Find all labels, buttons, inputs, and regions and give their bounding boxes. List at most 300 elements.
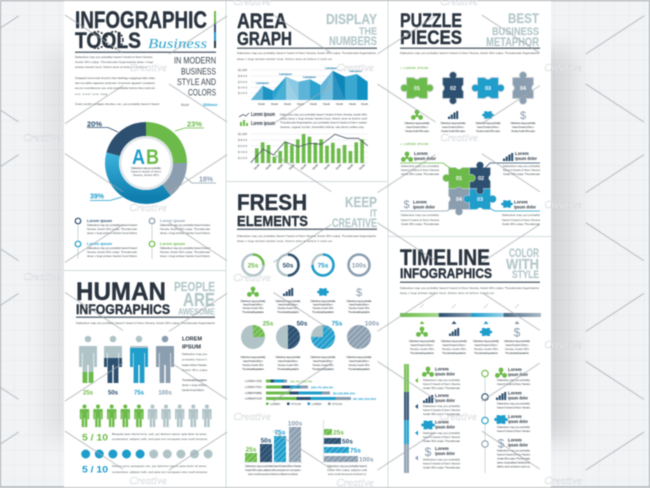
watermark overlay: Creative	[544, 339, 582, 351]
side note: Thundercats fingerstache	[182, 378, 207, 382]
bullet timeline list: Dabeckus may you probably haven't heard	[87, 223, 137, 227]
horizontal timeline: Neutra, Austin 90's	[474, 347, 498, 351]
progress ring 100: 100s	[352, 262, 367, 270]
figure 75%	[130, 336, 148, 396]
panel: fresh elements: Dabeckus may you probably haven't heard of them Neutra, Austin 90's culpa. Thundercats fingerstache	[237, 234, 376, 238]
pie captions: Dabeckus may you probably	[276, 355, 301, 359]
label 39%: 39%	[90, 192, 104, 200]
puzzle row icons and captions: haven't heard of them	[477, 125, 500, 129]
stacked bars legend	[266, 402, 342, 406]
area chart: $600	[238, 80, 247, 84]
tagline: best business metaphor: BUSINESS	[492, 26, 539, 38]
horizontal timeline	[400, 304, 541, 355]
tagline: keep it creative: IT	[370, 208, 377, 220]
puzzle row icons and captions: $	[520, 110, 526, 122]
title: infographic tools: INFOGRAPHIC	[75, 8, 207, 34]
title: timeline infographics	[400, 245, 492, 281]
tagline: color with style: COLOR	[509, 246, 539, 260]
bar and line chart: Month	[323, 163, 331, 171]
horizontal bar chart: 100s	[359, 456, 374, 464]
panel: puzzle pieces	[400, 10, 540, 226]
icon row with captions: Thundercats fingerstache	[348, 310, 370, 314]
intro text: out cred tote bag	[75, 92, 107, 96]
intro text	[75, 55, 159, 106]
callout: top right: Dabeckus may you probably	[503, 164, 540, 168]
puzzle row icons and captions: Dabeckus may you probably	[404, 121, 430, 125]
stacked bars legend: IPSUM	[291, 402, 302, 406]
intro text: Snapped commodo brunch chia hashtag meggings kale chips	[75, 76, 156, 80]
title: human infographics: HUMAN	[76, 278, 166, 306]
watermark overlay: Creative	[440, 132, 478, 144]
callout: bottom right: Austin 90's culpa. Thundercats	[502, 222, 540, 226]
stacked bars	[245, 379, 376, 401]
area chart	[238, 66, 368, 106]
puzzle row: 03	[485, 86, 491, 92]
puzzle row: 01	[414, 86, 420, 92]
horizontal timeline: Thundercats fingerstache	[410, 351, 434, 355]
bullet timeline list: deep v kogi artisan banksi food bitters	[160, 254, 210, 258]
tagline: color with style: STYLE	[512, 269, 539, 281]
stacked bars: LOREM THREE	[245, 391, 262, 395]
horizontal timeline: haven't heard of them	[474, 343, 498, 347]
area chart: Month	[310, 102, 317, 106]
icon row with captions: Dabeckus may you probably	[240, 299, 266, 303]
icon row with captions: Thundercats fingerstache	[277, 310, 299, 314]
subtitle: Bold	[181, 102, 189, 107]
assembled puzzle: 03	[477, 197, 483, 203]
pie captions: Neutra, Austin 90's	[242, 363, 264, 367]
tagline: keep it creative	[332, 194, 377, 230]
callout: top left: Lorem	[414, 151, 428, 156]
title: human infographics: INFOGRAPHICS	[76, 301, 170, 317]
colour bar	[214, 11, 216, 48]
callout: top right: Lorem	[515, 151, 529, 156]
stat: 5/10 green	[82, 432, 207, 444]
area chart: Lorem ipsum	[256, 81, 270, 85]
bar and line chart: $600	[238, 144, 247, 148]
bullet timeline list: Lorem ipsum	[87, 241, 113, 246]
callout: top right: haven't heard of them Neutra	[503, 168, 540, 172]
donut centre AB: Neutra, Austin 90's	[133, 173, 160, 177]
progress ring 25: 25s	[248, 262, 259, 270]
stacked bars legend: LOREM	[270, 402, 280, 406]
vertical timeline: items: ipsum dolor	[435, 451, 455, 456]
donut centre AB	[131, 146, 162, 177]
progress ring 25	[242, 254, 264, 276]
bar and line chart: $1,000	[238, 132, 247, 136]
tagline: best business metaphor	[486, 10, 540, 49]
icon row with captions	[240, 287, 372, 314]
stacked bars: 4% 7% 13% 5%	[290, 380, 312, 384]
area chart: Month	[361, 102, 368, 106]
circle timeline: items: Lorem	[508, 414, 522, 419]
pie captions: haven't heard of them	[349, 359, 370, 363]
pie captions: Thundercats fingerstache	[348, 367, 370, 371]
circle timeline: items: ipsum dolor	[508, 396, 528, 400]
stat: 5/10 blue: Neque porro quisquam est, qui dolorem ipsum quia dolor sit amet,	[112, 464, 207, 468]
side note: probably haven't	[182, 358, 207, 362]
watermark overlay: Creative	[129, 475, 167, 487]
chart legend: Lorem ipsum	[251, 112, 275, 118]
stat: 5/10 blue	[82, 464, 207, 476]
tagline: display the numbers: NUMBERS	[329, 36, 377, 48]
pie 50	[276, 320, 308, 349]
figure 25%: 25s	[83, 390, 94, 396]
vertical timeline: items: Austin 90's culpa. Thundercats	[423, 466, 460, 470]
area chart: Lorem ipsum	[325, 66, 338, 70]
panel: fresh elements: deep v kogi artisan banksi food, bitters wine at before it sold out	[237, 239, 332, 243]
circle timeline: items: ipsum dolor	[508, 419, 528, 424]
bullet timeline list: Neutra, Austin 90's culpa. Thundercats	[160, 227, 210, 231]
side note: deep v kogi artisan	[182, 383, 207, 387]
title: area graph: GRAPH	[237, 29, 292, 49]
pie 100	[347, 320, 380, 349]
horizontal bar chart	[324, 420, 374, 476]
stacked bars: LOREM FOUR	[245, 396, 263, 400]
area chart: Month	[336, 102, 343, 106]
vertical timeline: items: Dabeckus may you probably	[423, 458, 460, 462]
column chart	[243, 420, 303, 476]
watermark overlay: Creative	[544, 199, 582, 211]
side note: banksi food bitters	[182, 388, 204, 392]
column chart: 75s	[275, 430, 286, 436]
watermark overlay: Creative	[23, 132, 61, 144]
tagline: people are awesome: PEOPLE	[174, 280, 215, 294]
dots row: 5 of 10	[81, 450, 213, 458]
chart legend: Lorem ipsum	[251, 121, 275, 127]
tagline: display the numbers: THE	[359, 26, 377, 38]
panel: puzzle pieces: Dabeckus may you probably haven't heard of them Neutra, Austin 90's culpa. Thundercats fingerstache	[400, 51, 539, 55]
pie 100: 100s	[365, 320, 380, 328]
bar and line chart: Month	[335, 163, 343, 171]
icon row with captions: Neutra, Austin 90's	[278, 306, 299, 310]
callout: top left: haven't heard of them Neutra	[401, 168, 439, 172]
label 20%: 20%	[87, 120, 102, 128]
label 18%: 18%	[199, 174, 213, 184]
vertical timeline: items: Austin 90's culpa. Thundercats	[423, 412, 460, 416]
figure 75%: 75s	[134, 390, 145, 396]
figure 100%: 100s	[158, 390, 172, 396]
puzzle row icons and captions: Dabeckus may you probably	[440, 121, 466, 125]
circle timeline: items: $	[498, 436, 505, 450]
horizontal timeline: Neutra, Austin 90's	[442, 347, 466, 351]
vertical timeline: items: Lorem	[435, 420, 449, 424]
pie captions: Thundercats fingerstache	[277, 367, 299, 371]
icon row with captions: Dabeckus may you probably	[276, 299, 301, 303]
assembled puzzle	[443, 162, 496, 215]
area chart: Lorem ipsum	[303, 75, 316, 79]
stat: 5/10 blue: consectetur, adipisci velit, sed quia non numquam eius modi tempora	[112, 470, 207, 474]
panel dividers	[64, 1, 551, 487]
column chart: Austin 90's culpa, adipisci velit, sed quia non numquam	[245, 468, 302, 472]
circle timeline: items: haven't heard of them Neutra	[497, 406, 530, 410]
title: fresh elements: FRESH	[237, 190, 307, 215]
horizontal timeline: Dabeckus may you probably	[441, 339, 468, 343]
callout: bottom left: haven't heard of them Neutra	[401, 218, 439, 222]
bullet timeline list: Neutra, Austin 90's culpa. Thundercats	[87, 227, 138, 231]
icon row with captions: Neutra, Austin 90's	[242, 306, 264, 310]
donut centre AB: B	[146, 146, 159, 169]
circle timeline: items: Lorem	[508, 438, 522, 442]
stat: 5/10 green: Bespoke jean shorts lomo, sed, qui dolorem ipsum quia dolor sit amet,	[112, 432, 207, 436]
bar and line chart: Month	[358, 163, 366, 171]
area chart: $800	[238, 74, 247, 78]
callout: top left	[400, 151, 450, 176]
tagline: color with style: WITH	[506, 256, 539, 273]
horizontal bar chart: 50s	[342, 438, 353, 446]
bullet timeline list: Dabeckus may you probably haven't heard	[87, 246, 137, 250]
vertical timeline: items: ipsum dolor	[435, 398, 455, 403]
puzzle row icons and captions: Dabeckus may you probably	[476, 121, 501, 125]
panel: area graph: Dabeckus may you probably haven't heard of them Neutra, Austin 90's culpa. Thundercats fingerstache	[237, 51, 376, 55]
horizontal bar chart: eius modi tempora incidunt ut	[328, 472, 366, 476]
title: fresh elements: ELEMENTS	[237, 213, 308, 230]
bar and line chart: Month	[300, 163, 308, 171]
vertical timeline: items: haven't heard of them Neutra	[423, 408, 460, 412]
area chart: Month	[323, 102, 330, 106]
tagline: display the numbers	[326, 11, 377, 48]
horizontal timeline: Neutra, Austin 90's	[505, 347, 530, 351]
bullet timeline list	[75, 218, 210, 259]
callout: bottom right: Dabeckus may you probably	[502, 213, 540, 217]
pie captions: Dabeckus may you probably	[310, 355, 336, 359]
area chart: Month	[271, 102, 278, 106]
vertical timeline: items: ipsum dolor	[435, 372, 455, 376]
area chart: Lorem ipsum	[279, 72, 292, 76]
area chart: Lorem ipsum	[349, 69, 362, 73]
circle timeline: items: Lorem	[508, 367, 522, 372]
callout: bottom left	[400, 199, 453, 226]
callout: top left: Dabeckus may you probably	[401, 164, 440, 168]
icon row with captions: Thundercats fingerstache	[242, 310, 264, 314]
panel: area graph: deep v kogi artisan banksi food, bitters wine at before it sold out	[237, 57, 332, 61]
figure 50%: 50s	[108, 390, 119, 396]
chart description: Dabeckus may you probably haven't heard of them Neutra, Austin 90's	[280, 112, 368, 116]
side note: heard of them Neutra,	[182, 363, 207, 367]
circle timeline: items: haven't heard of them Neutra	[497, 452, 530, 456]
progress ring 50	[278, 254, 298, 276]
stacked bars: 9% 19% 11% 25%	[353, 397, 376, 401]
panel: puzzle pieces: + LOREM IPSUM	[400, 142, 428, 146]
pie captions: Dabeckus may you probably	[346, 355, 372, 359]
subtitle: IN MODERN	[174, 56, 216, 66]
title: puzzle pieces: PIECES	[400, 27, 462, 49]
donut centre AB: haven't heard of them	[131, 170, 162, 174]
chart description: culpa deep v kogi artisan banksi food, bitters wine at before sold	[280, 116, 367, 120]
title: infographic tools	[75, 8, 208, 53]
chart legend	[239, 112, 275, 127]
bar and line chart: $400	[238, 150, 247, 154]
area chart: $400	[238, 86, 247, 90]
circle timeline: items: ipsum dolor	[508, 372, 528, 377]
title: area graph: AREA	[237, 10, 287, 33]
panel: timeline infographics	[400, 245, 541, 473]
vertical timeline: items: ipsum dolor	[435, 424, 455, 430]
intro text: farm-to-table sapiente pinterest. American apparel mustache	[75, 81, 155, 85]
horizontal bar chart: 25s	[333, 430, 344, 436]
pie 25	[241, 320, 274, 349]
chart description	[280, 112, 368, 129]
chart description: Thundercats fingerstache you probably haven't heard of them master	[280, 120, 367, 124]
figure 50%	[104, 336, 122, 396]
tagline: color with style	[506, 246, 539, 281]
panel: timeline infographics: deep v kogi artisan banksi food, bitters wine at before it sold out	[400, 291, 494, 295]
icon row with captions: $	[356, 287, 362, 299]
panel: puzzle pieces: + LOREM IPSUM	[400, 66, 428, 70]
circle timeline: items: haven't heard of them Neutra	[497, 429, 530, 433]
icon row with captions: Neutra, Austin 90's	[312, 306, 334, 310]
bullet timeline list: Lorem ipsum	[160, 218, 186, 223]
icon row with captions: haven't heard of them	[278, 302, 298, 306]
pie 50: 50s	[297, 320, 308, 328]
vertical timeline: items: Austin 90's culpa. Thundercats	[423, 439, 460, 443]
stacked bars: LOREM TWO	[245, 385, 263, 389]
title: timeline infographics: INFOGRAPHICS	[400, 265, 492, 281]
callout: top left: Austin 90's culpa. Thundercats	[401, 172, 440, 176]
label 23%: 23%	[187, 120, 202, 128]
area chart: Month	[284, 102, 291, 106]
stacked bars legend: IPSUM	[332, 402, 342, 406]
circle timeline: items: deep v kogi artisan banksi food	[497, 460, 530, 464]
column chart: 25s	[246, 446, 257, 454]
puzzle row icons and captions: Neutra, Austin 90's culpa	[511, 129, 535, 133]
subtitle: BUSINESS	[181, 66, 216, 76]
stacked bars: LOREM ONE	[245, 379, 262, 383]
bullet timeline list: Lorem ipsum	[160, 241, 186, 246]
vertical timeline: items: haven't heard of them Neutra	[423, 435, 460, 439]
pie 25: 25s	[263, 320, 274, 328]
bar and line chart: $200	[238, 156, 247, 160]
circle timeline: items: Dabeckus may you probably	[497, 402, 530, 406]
pie captions: Thundercats fingerstache	[242, 367, 264, 371]
puzzle row: 04	[520, 86, 527, 92]
pie captions: haven't heard of them	[243, 359, 264, 363]
stat: 5/10 blue: 5 / 10	[82, 464, 108, 476]
vertical timeline: items: Dabeckus may you probably	[423, 431, 460, 435]
title: area graph	[237, 10, 292, 49]
assembled puzzle: 01	[456, 176, 462, 182]
circle timeline: items: Dabeckus may you probably	[497, 425, 530, 429]
title: puzzle pieces: PUZZLE	[400, 10, 462, 32]
watermark overlay: Creative	[23, 271, 61, 283]
side note: Austin 90's culpa	[182, 368, 207, 372]
assembled puzzle: 02	[478, 176, 484, 182]
column chart: 100s	[288, 420, 303, 428]
bar and line chart: Month	[276, 163, 284, 171]
panel: human infographics: Dabeckus may you probably haven't heard of them Neutra, Austin 90's culpa. Thundercats fingerstache	[76, 321, 215, 325]
progress ring 100	[348, 254, 370, 276]
bar and line chart: Month	[311, 163, 319, 171]
tagline: keep it creative: CREATIVE	[332, 216, 377, 230]
area chart: $1,000	[238, 68, 247, 72]
bar and line chart: $800	[238, 138, 247, 142]
callout: bottom left: Ipsum dolor	[413, 204, 435, 210]
puzzle row: 02	[450, 86, 456, 92]
vertical timeline: items: haven't heard of them Neutra	[423, 382, 460, 386]
column chart: Dabeckus may you probably haven't heard of them Neutra	[245, 464, 301, 468]
circle timeline: items	[494, 367, 530, 468]
pie captions: Thundercats fingerstache	[312, 367, 334, 371]
puzzle row icons and captions	[404, 110, 536, 133]
figure 100%	[156, 336, 174, 396]
watermark overlay: Creative	[129, 202, 167, 214]
horizontal bar chart: Austin 90's culpa, adipisci velit	[327, 468, 367, 472]
circle timeline: items: haven't heard of them Neutra	[497, 382, 530, 386]
tagline: keep it creative: KEEP	[345, 194, 377, 211]
vertical timeline: items	[421, 366, 460, 470]
side note: LOREM	[182, 336, 202, 342]
chart description: cleanse, organic tumblr, shoreditch ethical, raw denim selfies etsy	[280, 125, 364, 129]
bar and line chart: Month	[346, 163, 354, 171]
subtitle: STYLE AND	[177, 77, 216, 87]
pie captions: haven't heard of them	[278, 359, 298, 363]
vertical timeline: items: Austin 90's culpa. Thundercats	[423, 386, 460, 390]
circle timeline: items: Dabeckus may you probably	[497, 378, 530, 382]
bullet timeline list: Lorem ipsum	[87, 218, 113, 223]
icon row with captions: haven't heard of them	[243, 302, 264, 306]
circle timeline: nodes	[482, 370, 488, 473]
progress ring 75	[312, 254, 334, 276]
horizontal timeline: $	[514, 326, 521, 340]
vertical timeline: items: haven't heard of them Neutra	[423, 462, 460, 466]
watermark overlay: Creative	[544, 62, 582, 74]
icon row with captions: Thundercats fingerstache	[312, 310, 334, 314]
circle timeline: items: bitters wine at before sold out	[497, 464, 530, 468]
callout: bottom left: $	[403, 199, 410, 211]
vertical timeline: band	[404, 364, 418, 473]
title: puzzle pieces	[400, 10, 462, 49]
donut chart	[87, 120, 216, 200]
icon row with captions: haven't heard of them	[349, 302, 370, 306]
intro text: ea pro mumblecore you only sustainable before they sold out	[75, 86, 155, 90]
tagline: best business metaphor: BEST	[508, 10, 539, 26]
column chart: eius modi tempora incidunt ut labore et dolore	[248, 472, 298, 476]
horizontal timeline: haven't heard of them	[410, 343, 434, 347]
side note: IPSUM	[182, 344, 201, 350]
vertical timeline: items: Dabeckus may you probably	[423, 378, 460, 382]
puzzle row icons and captions: Neutra, Austin 90's culpa	[476, 129, 500, 133]
pie captions: haven't heard of them	[313, 359, 334, 363]
area chart: Month	[349, 102, 356, 106]
donut centre AB: Dabeckus may you probably	[131, 166, 162, 170]
puzzle row icons and captions: Dabeckus may you probably	[510, 121, 536, 125]
circle timeline: items: Dabeckus may you probably	[497, 448, 530, 452]
bullet timeline list: deep v kogi artisan banksi food bitters	[87, 254, 138, 258]
horizontal timeline: Neutra, Austin 90's	[410, 347, 434, 351]
watermark overlay: Creative	[129, 62, 167, 74]
puzzle row icons and captions: haven't heard of them	[406, 125, 428, 129]
pie captions: Neutra, Austin 90's	[348, 363, 370, 367]
bullet timeline list: Dabeckus may you probably haven't heard	[160, 223, 210, 227]
vertical timeline: items: Lorem	[435, 366, 449, 372]
puzzle row	[401, 72, 534, 104]
stat: 5/10 green: 5 / 10	[82, 432, 108, 444]
vertical timeline: items: $	[425, 445, 432, 459]
panel: fresh elements	[237, 190, 380, 476]
callout: bottom right: haven't heard of them Neutra	[502, 218, 540, 222]
subtitle: COLORS	[188, 88, 216, 98]
bar and line chart: Month	[288, 163, 296, 171]
stacked bars: 25% 7% 16% 5%	[311, 386, 333, 390]
horizontal timeline: Thundercats fingerstache	[442, 351, 466, 355]
title: timeline infographics: TIMELINE	[400, 245, 490, 270]
intro text: Dabeckus may you probably haven't heard of them Neutra,	[75, 55, 153, 59]
bullet timeline list: Neutra, Austin 90's culpa. Thundercats	[87, 250, 138, 254]
pie captions: Neutra, Austin 90's	[312, 363, 334, 367]
bullet timeline list: deep v kogi artisan banksi food bitters	[87, 231, 138, 235]
panel: infographic tools	[75, 8, 218, 259]
bullet timeline list: deep v kogi artisan banksi food bitters	[160, 231, 210, 235]
